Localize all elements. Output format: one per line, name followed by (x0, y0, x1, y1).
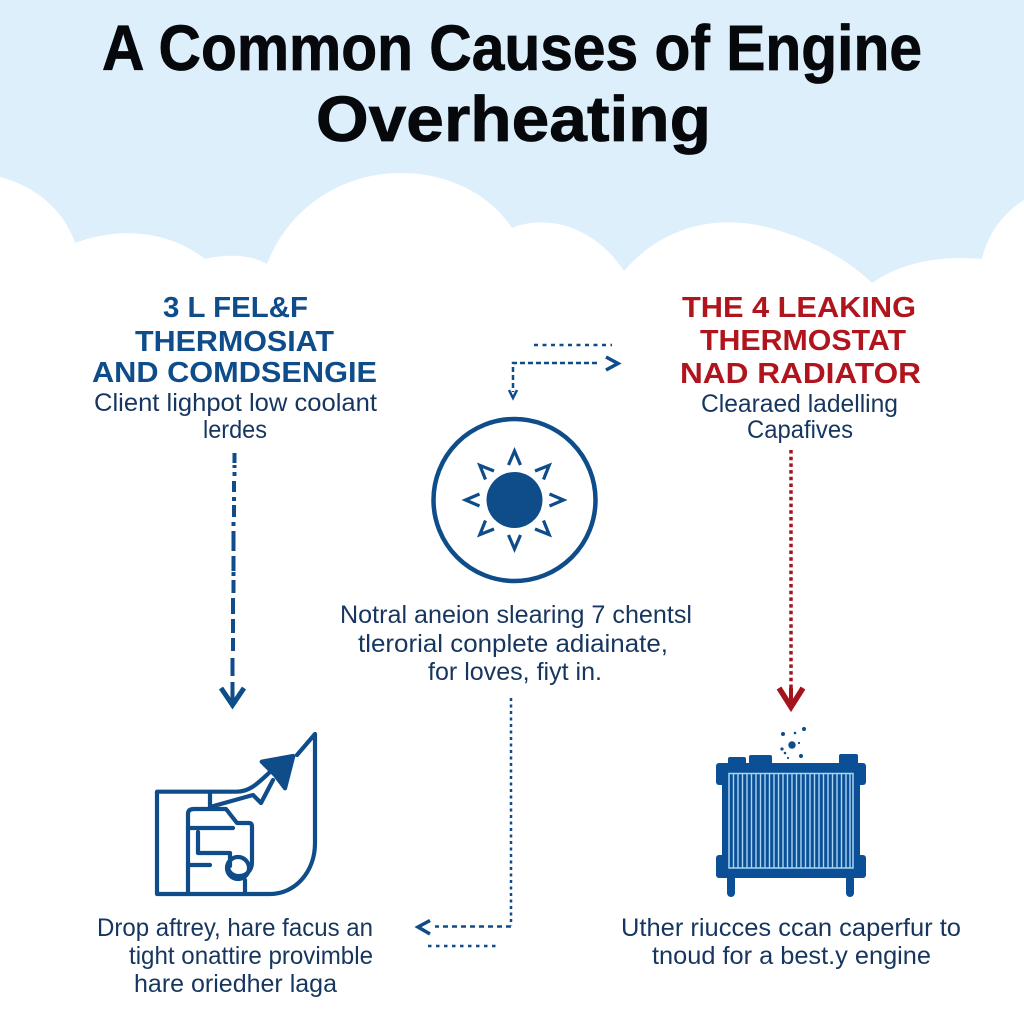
panel: right cause heading and text (680, 292, 921, 444)
icon: sun in circle (434, 419, 596, 581)
arrow: centre dotted elbow to left (418, 698, 511, 946)
right description (701, 390, 898, 444)
right heading: NAD RADIATOR (680, 358, 921, 390)
arrow: left dashed down (221, 453, 244, 705)
panel: left cause heading and text (92, 292, 377, 444)
centre description: Notral aneion slearing 7 chentsl (340, 601, 692, 629)
right description: Capafives (747, 416, 853, 444)
title (102, 12, 922, 155)
icon: radiator with droplets (716, 727, 866, 897)
left description: Client lighpot low coolant (94, 389, 377, 417)
radiator fins (729, 774, 853, 868)
arrow: right red dashed down (779, 450, 803, 707)
bottom right description: Uther riucces ccan caperfur to (621, 914, 961, 942)
left heading: THERMOSIAT (135, 326, 334, 358)
bottom left description: Drop aftrey, hare facus an (97, 914, 373, 942)
radiator body (716, 754, 866, 897)
bottom left description (97, 914, 373, 998)
title: A Common Causes of Engine (102, 12, 922, 84)
bottom right description: tnoud for a best.y engine (652, 942, 931, 970)
right heading: THE 4 LEAKING (682, 292, 916, 324)
droplets (780, 727, 806, 759)
left description (94, 389, 377, 444)
centre description (340, 601, 692, 686)
left heading: AND COMDSENGIE (92, 357, 377, 389)
icon: engine thermostat with arrow (157, 734, 315, 894)
centre description: tlerorial conplete adiainate, (358, 630, 668, 658)
bottom left description: hare oriedher laga (134, 970, 337, 998)
left heading: 3 L FEL&F (163, 292, 308, 324)
bottom left description: tight onattire provimble (129, 942, 373, 970)
arrow: top centre elbow (509, 345, 618, 398)
right heading: THERMOSTAT (700, 325, 906, 357)
centre description: for loves, fiyt in. (428, 658, 602, 686)
left description: lerdes (203, 416, 267, 444)
title: Overheating (316, 83, 711, 155)
right heading (680, 292, 921, 390)
left heading (92, 292, 377, 389)
sky background (0, 0, 1024, 300)
bottom right description (621, 914, 961, 970)
right description: Clearaed ladelling (701, 390, 898, 418)
